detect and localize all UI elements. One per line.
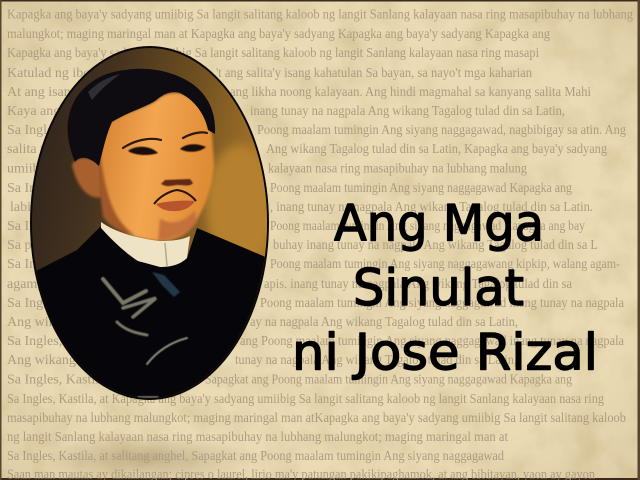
background text: poem lines: Sa In [7, 219, 36, 234]
face [99, 93, 214, 241]
background text: poem lines: inang tunay na nagpala Ang wikang Tagalog tulad din sa Latin, [250, 104, 565, 119]
background text: poem lines: Sa In [7, 181, 36, 196]
background text: poem lines: Sa Ingles, Kastila, [7, 372, 109, 388]
background text: poem lines: tunay na nagpala Ang wikang Tagalog tulad din sa Latin, [235, 353, 517, 368]
title: Ang Mga Sinulat ni Jose Rizal: Sinulat [353, 259, 524, 317]
background text: poem lines: Ang wikang [7, 353, 76, 368]
background text: poem lines: apis. inang tunay na nagpala Ang wikang Tagalog tulad din sa [264, 277, 573, 292]
ear [72, 158, 102, 198]
background text: poem lines: Kapagka ang baya'y sadyang umiibig Sa langit salitang kaloob ng langit Sanlang kalayaan nasa ring masapi [7, 46, 539, 61]
tie [152, 272, 180, 297]
title: Ang Mga Sinulat ni Jose Rizal: Ang Mga [334, 194, 544, 252]
background text: poem lines: buhay inang tunay na nagpala Ang wikang Tagalog tulad din sa L [273, 238, 598, 253]
coat details [103, 279, 187, 397]
background text: poem lines: ng langit Sanlang kalayaan nasa ring masapibuhay na lubhang malungkot; maging maringal man at [7, 430, 508, 445]
eyes [128, 144, 206, 155]
background text: poem lines: umiibig [7, 162, 51, 176]
background text: poem lines: Katulad ng ibong [7, 66, 104, 81]
background text: poem lines: Poong maalam tumingin Ang siyang naggagawad Kapagka ang bay [270, 219, 585, 234]
collar [101, 222, 190, 267]
background text: poem lines: Sa Ingles, Kastila, at salitang anghel, Sapagkat ang Poong maalam tumingin Ang siyang naggagawad [7, 449, 504, 464]
background text: poem lines: Sa pa [7, 238, 38, 253]
coat [36, 226, 265, 398]
background text: poem lines: Ang wik [7, 315, 56, 330]
background text: poem lines: labis [10, 200, 36, 215]
background text: poem lines: malungkot; maging maringal man at Kapagka ang baya'y sadyang Kapagka ang baya'y sadyang Kapagka ang [7, 27, 550, 42]
background text: poem lines: Kaya ang [7, 104, 60, 119]
title: Ang Mga Sinulat ni Jose Rizal [292, 194, 598, 382]
background text: poem lines: kalayaan nasa ring masapibuhay na lubhang malung [268, 162, 527, 176]
background text: poem lines: , inang tunay na nagpala Ang wikang Tagalog tulad din sa Latin. [270, 200, 593, 215]
background text: poem lines: Sa Ingles, [7, 334, 62, 349]
eyebrows [123, 132, 207, 148]
hair [68, 69, 215, 166]
background text: poem lines: Sapagkat ang Poong maalam tumingin Ang siyang naggagawad Kapagka ang [205, 372, 572, 388]
background text: poem lines: agam, [7, 277, 41, 292]
background text: poem lines: At ang isang [7, 85, 78, 100]
background text: poem lines: Poong maalam tumingin Ang siyang naggagawad Kapagka ang [270, 181, 572, 196]
background text: poem lines: Sa Ingles [7, 123, 59, 138]
background text: poem lines: Sa Ingl [7, 296, 47, 311]
moustache and lips [154, 190, 196, 211]
background text: poem lines: ang likha noong kalayaan. Ang hindi magmahal sa kanyang salita Mahi [230, 85, 591, 100]
background text: poem lines: salita n [7, 142, 47, 157]
background text: poem lines: 't ang salita'y isang kahatulan Sa bayan, sa nayo't mga kaharian [216, 66, 532, 81]
oval portrait of Jose Rizal [28, 45, 274, 405]
background text: poem lines: Sa In [7, 257, 36, 272]
nose [161, 179, 193, 186]
background text: poem lines: ay na nagpala Ang wikang Tagalog tulad din sa Latin, [250, 315, 518, 330]
title: Ang Mga Sinulat ni Jose Rizal: ni Jose Rizal [292, 324, 598, 382]
